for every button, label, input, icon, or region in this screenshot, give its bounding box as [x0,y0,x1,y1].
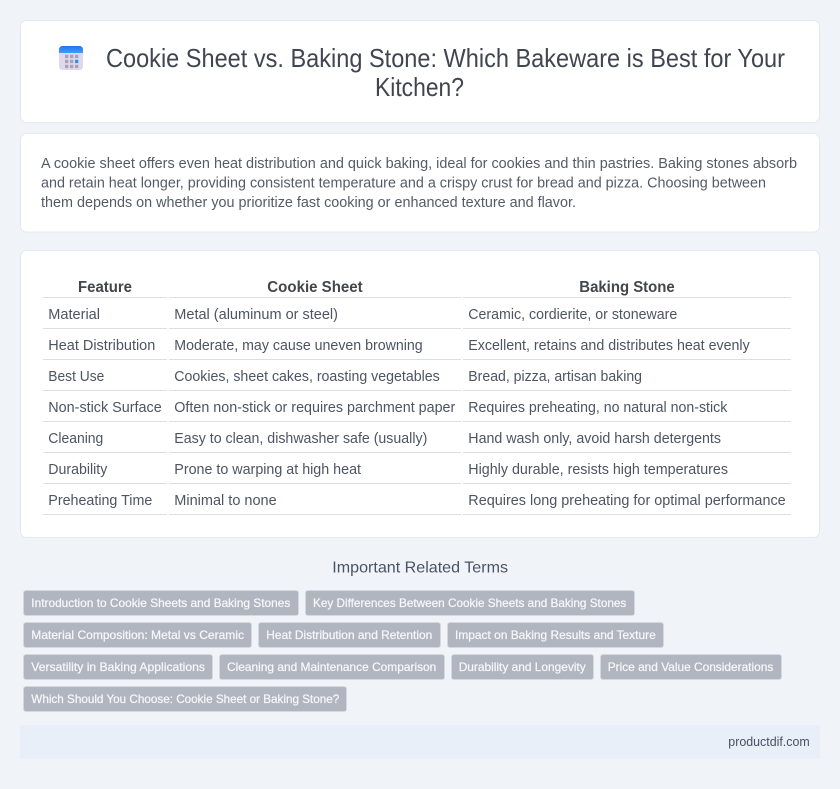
row: durability [48,462,728,478]
tag: Impact on Baking Results and Texture [455,628,656,642]
tag: Heat Distribution and Retention [266,628,432,642]
tag: Durability and Longevity [459,660,586,674]
tag [452,654,594,680]
table header: Feature [78,279,132,296]
row: preheating time [48,493,786,509]
row: heat distribution: Excellent, retains and distributes heat evenly [468,338,750,354]
row: cleaning: Hand wash only, avoid harsh detergents [468,431,721,447]
row: material: Material [48,307,100,323]
tag [24,686,346,712]
title: Cookie Sheet vs. Baking Stone: Which Bakeware is Best for Your [106,45,785,73]
row: best use: Cookies, sheet cakes, roasting vegetables [174,369,440,385]
tag: Price and Value Considerations [608,660,773,674]
tag [258,622,440,648]
summary text: A cookie sheet offers even heat distribution and quick baking, ideal for cookies and thin pastries. Baking stones absorb [41,156,797,172]
heading: important related terms: Important Related Terms [332,560,508,577]
summary text: them depends on whether you prioritize fast cooking or enhanced texture and flavor. [41,195,576,211]
row: durability: Prone to warping at high heat [174,462,361,478]
panel: summary [20,134,820,232]
row: best use: Bread, pizza, artisan baking [468,369,642,385]
title: Kitchen? [375,74,464,102]
footer [20,725,820,759]
tag: Versatility in Baking Applications [31,660,205,674]
table header: Cookie Sheet [267,279,363,296]
tag [448,622,664,648]
related term tags [24,590,782,712]
summary text: and retain heat longer, providing consistent temperature and a crispy crust for bread and pizza. Choosing between [41,176,766,192]
tag [24,590,298,616]
tag [24,622,252,648]
row: material: Metal (aluminum or steel) [174,307,338,323]
tag [220,654,444,680]
footer: productdif.com [728,734,810,749]
panel: title card [20,20,820,122]
row: durability: Durability [48,462,108,478]
tag: Key Differences Between Cookie Sheets and Baking Stones [313,596,626,610]
row: non-stick surface: Requires preheating, no natural non-stick [468,400,728,416]
row: non-stick surface: Often non-stick or requires parchment paper [174,400,456,416]
table header [78,279,675,296]
row: cleaning: Cleaning [48,431,103,447]
row: material [48,307,677,323]
panel: comparison table [20,250,820,538]
row: non-stick surface: Non-stick Surface [48,400,162,416]
tag: Which Should You Choose: Cookie Sheet or Baking Stone? [31,692,340,706]
row: preheating time: Minimal to none [174,493,277,509]
row: preheating time: Preheating Time [48,493,152,509]
icon: calendar [59,46,83,70]
table header: Baking Stone [579,279,675,296]
row: cleaning [48,431,721,447]
row: heat distribution [48,338,750,354]
tag [306,590,634,616]
row: heat distribution: Moderate, may cause uneven browning [174,338,423,354]
title [106,45,785,102]
row: cleaning: Easy to clean, dishwasher safe (usually) [174,431,427,447]
tag [600,654,782,680]
tag [24,654,212,680]
row: durability: Highly durable, resists high temperatures [468,462,728,478]
tag: Introduction to Cookie Sheets and Baking Stones [31,596,290,610]
row: heat distribution: Heat Distribution [48,338,155,354]
row: best use: Best Use [48,369,104,385]
row: preheating time: Requires long preheating for optimal performance [468,493,786,509]
row: non-stick surface [48,400,728,416]
row: best use [48,369,642,385]
tag: Material Composition: Metal vs Ceramic [31,628,244,642]
tag: Cleaning and Maintenance Comparison [227,660,436,674]
summary text [41,156,797,211]
row: material: Ceramic, cordierite, or stoneware [468,307,677,323]
